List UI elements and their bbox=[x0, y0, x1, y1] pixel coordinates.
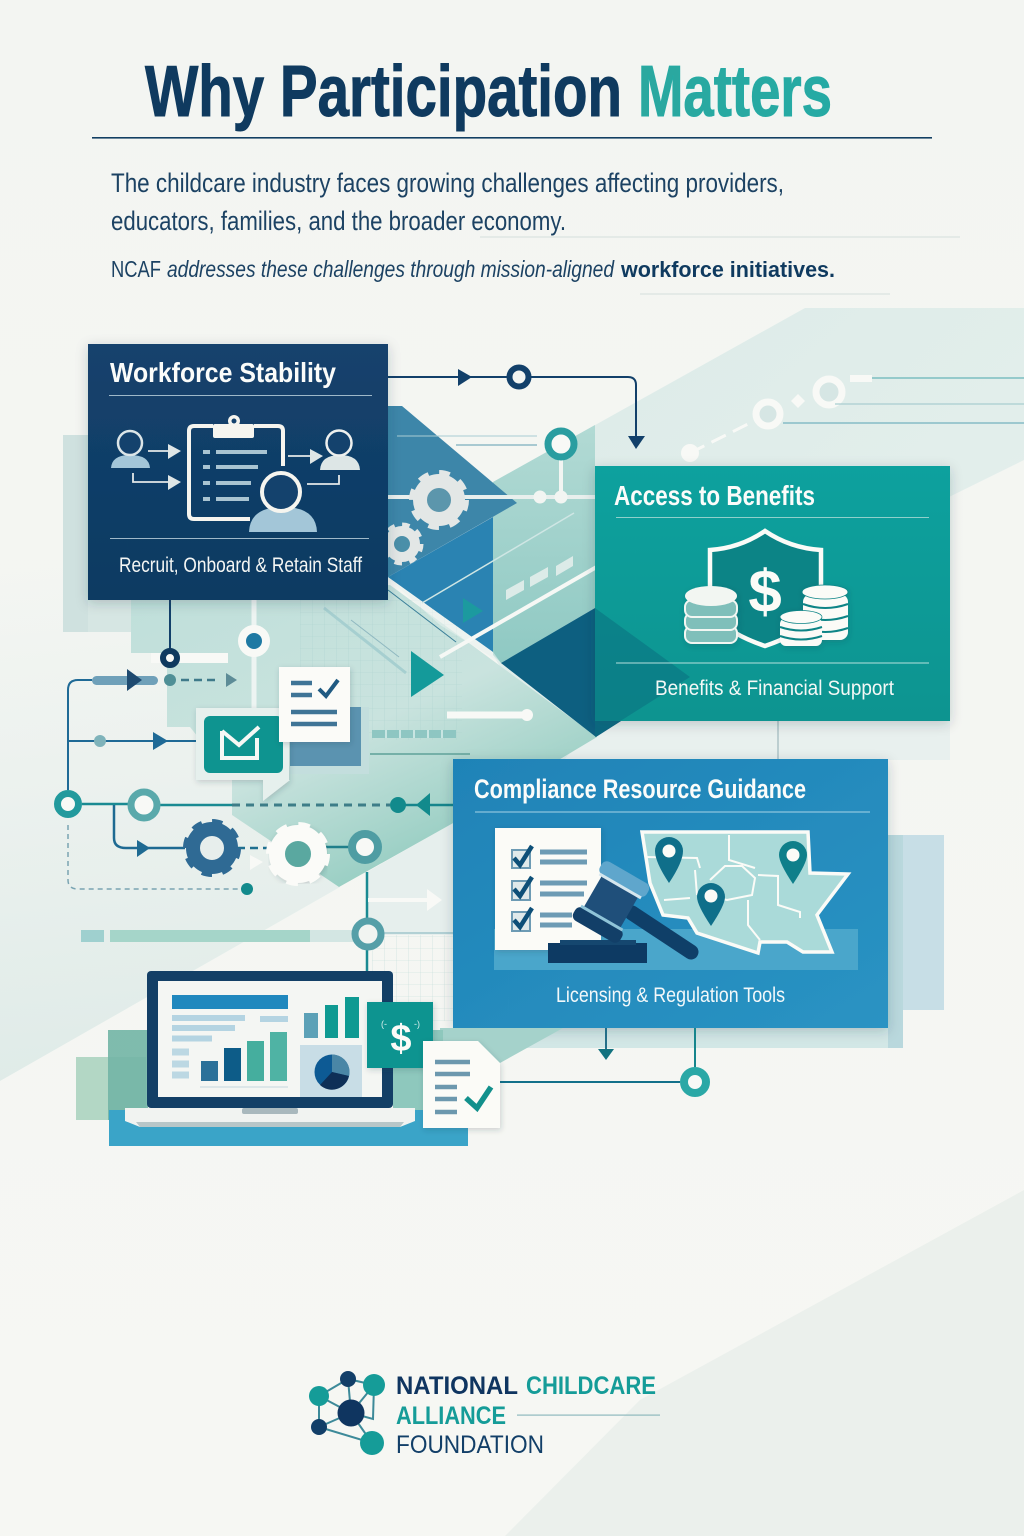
bar chart bbox=[200, 1032, 288, 1087]
icon: checklist document bbox=[495, 828, 601, 950]
connector: middle workflow with gears bbox=[58, 792, 453, 972]
card: compliance resource guidance bbox=[453, 759, 888, 1028]
icon: recruiting clipboard and people bbox=[111, 415, 360, 532]
mission statement: workforce initiatives. bbox=[620, 257, 835, 282]
connector: workflow left bbox=[68, 600, 266, 790]
card: workforce stability: Workforce Stability bbox=[110, 357, 336, 388]
intro text: educators, families, and the broader economy. bbox=[111, 206, 566, 236]
title rule bbox=[92, 137, 932, 139]
icon: shield with coins bbox=[685, 531, 848, 646]
icon: document with checklist and speech bubble bbox=[196, 667, 369, 801]
icon: dollar tile: -) bbox=[414, 1019, 420, 1029]
icon: dollar tile: (- bbox=[381, 1019, 387, 1029]
card: compliance resource guidance: Compliance Resource Guidance bbox=[474, 774, 806, 804]
title: Why Participation bbox=[145, 52, 622, 132]
logo: ALLIANCE bbox=[396, 1402, 506, 1430]
icon: gavel bbox=[548, 859, 691, 963]
logo bbox=[309, 1371, 660, 1459]
connector: teal node and gears bbox=[383, 431, 595, 721]
title: Matters bbox=[638, 52, 832, 132]
connectors below compliance card bbox=[500, 1028, 706, 1093]
icon: dollar tile: $ bbox=[390, 1018, 412, 1060]
icon: map with location pins bbox=[642, 832, 848, 953]
logo: NATIONAL bbox=[396, 1372, 518, 1400]
icon: shield with coins: $ bbox=[748, 558, 782, 625]
card: access to benefits bbox=[595, 466, 950, 737]
card: access to benefits: Benefits & Financial Support bbox=[655, 677, 894, 700]
mission statement: addresses these challenges through mission-aligned bbox=[167, 256, 615, 282]
icon: report document with check bbox=[423, 1041, 500, 1128]
connector: white nodes top right bbox=[681, 375, 1024, 462]
card: workforce stability: Recruit, Onboard & Retain Staff bbox=[119, 554, 362, 577]
logo: CHILDCARE bbox=[526, 1372, 656, 1400]
logo: FOUNDATION bbox=[396, 1431, 544, 1459]
logo icon: network bbox=[309, 1371, 385, 1455]
card: workforce stability bbox=[88, 344, 388, 600]
laptop dashboard bbox=[76, 971, 563, 1146]
icon: dollar tile bbox=[367, 1002, 433, 1068]
connector: workforce to benefits bbox=[388, 368, 645, 449]
background geometric shapes bbox=[63, 406, 944, 1048]
small bar chart bbox=[304, 997, 359, 1038]
card: access to benefits: Access to Benefits bbox=[614, 480, 815, 511]
intro text bbox=[111, 168, 784, 236]
card: compliance resource guidance: Licensing & Regulation Tools bbox=[556, 984, 785, 1007]
intro text: The childcare industry faces growing challenges affecting providers, bbox=[111, 168, 784, 198]
pie chart bbox=[300, 1045, 362, 1097]
mission statement: NCAF bbox=[111, 256, 161, 282]
